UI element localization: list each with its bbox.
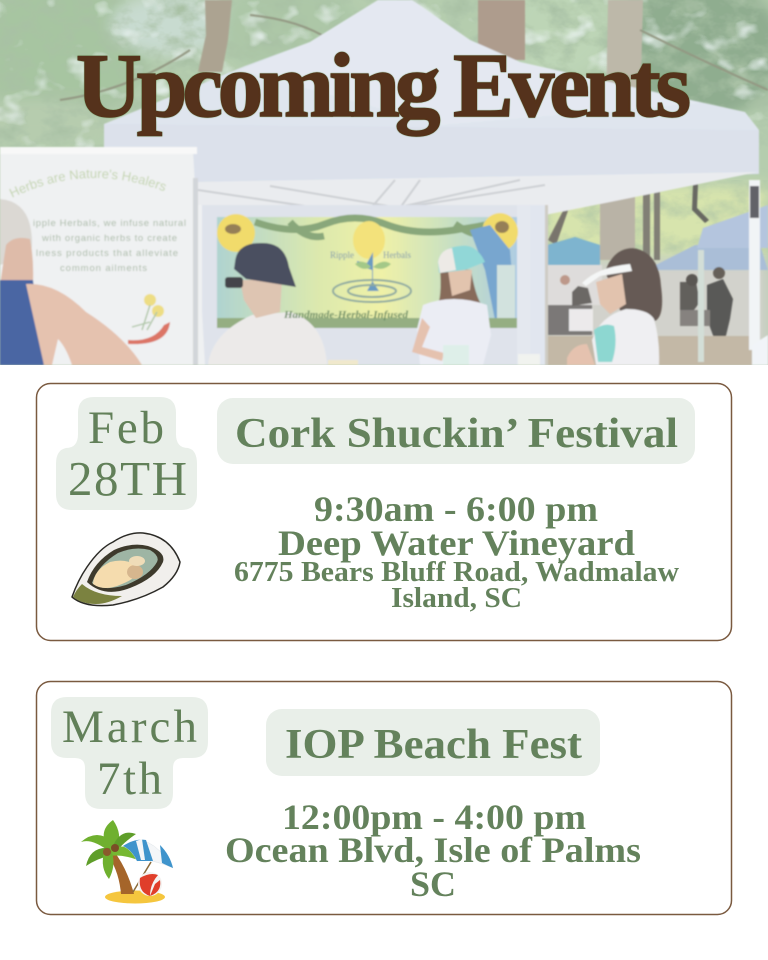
date badge: March 7th: [51, 697, 208, 809]
photo lettering: Ripple: [330, 250, 354, 260]
tent poles: [749, 180, 760, 350]
tree trunks: [198, 0, 232, 72]
photo lettering: ipple Herbals, we infuse natural: [33, 218, 186, 229]
tent roof: [104, 44, 759, 131]
event details: 12:00pm - 4:00 pm: [282, 797, 586, 837]
back wall: [198, 205, 545, 365]
event name pill: IOP Beach Fest: [285, 722, 582, 768]
cards on table: [518, 354, 540, 365]
date badge: Feb 28TH: Feb: [88, 402, 164, 454]
foliage texture: [0, 0, 768, 150]
icon: oyster: [72, 533, 180, 606]
photo lettering: common ailments: [60, 263, 147, 274]
photo: market tent booth: [0, 0, 768, 365]
left banner stand: [0, 150, 205, 365]
photo lettering: Herbals: [383, 250, 411, 260]
event details: Ocean Blvd, Isle of Palms: [225, 830, 641, 870]
event name pill: [217, 398, 695, 464]
date badge: March 7th: 7th: [97, 753, 162, 805]
blue tents background: [547, 237, 600, 265]
photo lettering: with organic herbs to create: [41, 233, 177, 244]
event details: [225, 797, 641, 904]
event details: 6775 Bears Bluff Road, Wadmalaw: [234, 557, 680, 588]
title: Upcoming Events: [76, 35, 691, 136]
event details: Deep Water Vineyard: [278, 523, 635, 563]
photo lettering: [8, 169, 412, 321]
photo lettering: Herbs are Nature's Healers: [8, 169, 166, 198]
date badge: March 7th: March: [62, 701, 197, 753]
event details: Island, SC: [391, 583, 522, 614]
booth banner: [217, 217, 517, 328]
date badge: Feb 28TH: 28TH: [68, 451, 187, 506]
event details: SC: [410, 864, 456, 904]
woman in visor: [605, 248, 662, 321]
photo lettering: lness products that alleviate: [36, 248, 178, 259]
panel: Cork Shuckin' Festival: [36, 384, 732, 640]
event details: [234, 489, 680, 614]
date badge: Feb 28TH: [56, 397, 197, 510]
photo lettering: Handmade-Herbal-Infused: [283, 309, 409, 321]
icon: palm tree and beach umbrella: [81, 820, 173, 904]
tent frame area: [197, 172, 752, 215]
panel: IOP Beach Fest: [36, 682, 732, 914]
event name pill: [266, 709, 600, 776]
person left: [0, 199, 32, 265]
banner chili and flowers: [128, 322, 170, 344]
background people and stalls: [547, 305, 592, 335]
event details: 9:30am - 6:00 pm: [314, 489, 598, 529]
event name pill: Cork Shuckin’ Festival: [235, 411, 678, 457]
person cap: [208, 312, 327, 365]
woman in teal cap: [438, 269, 481, 304]
